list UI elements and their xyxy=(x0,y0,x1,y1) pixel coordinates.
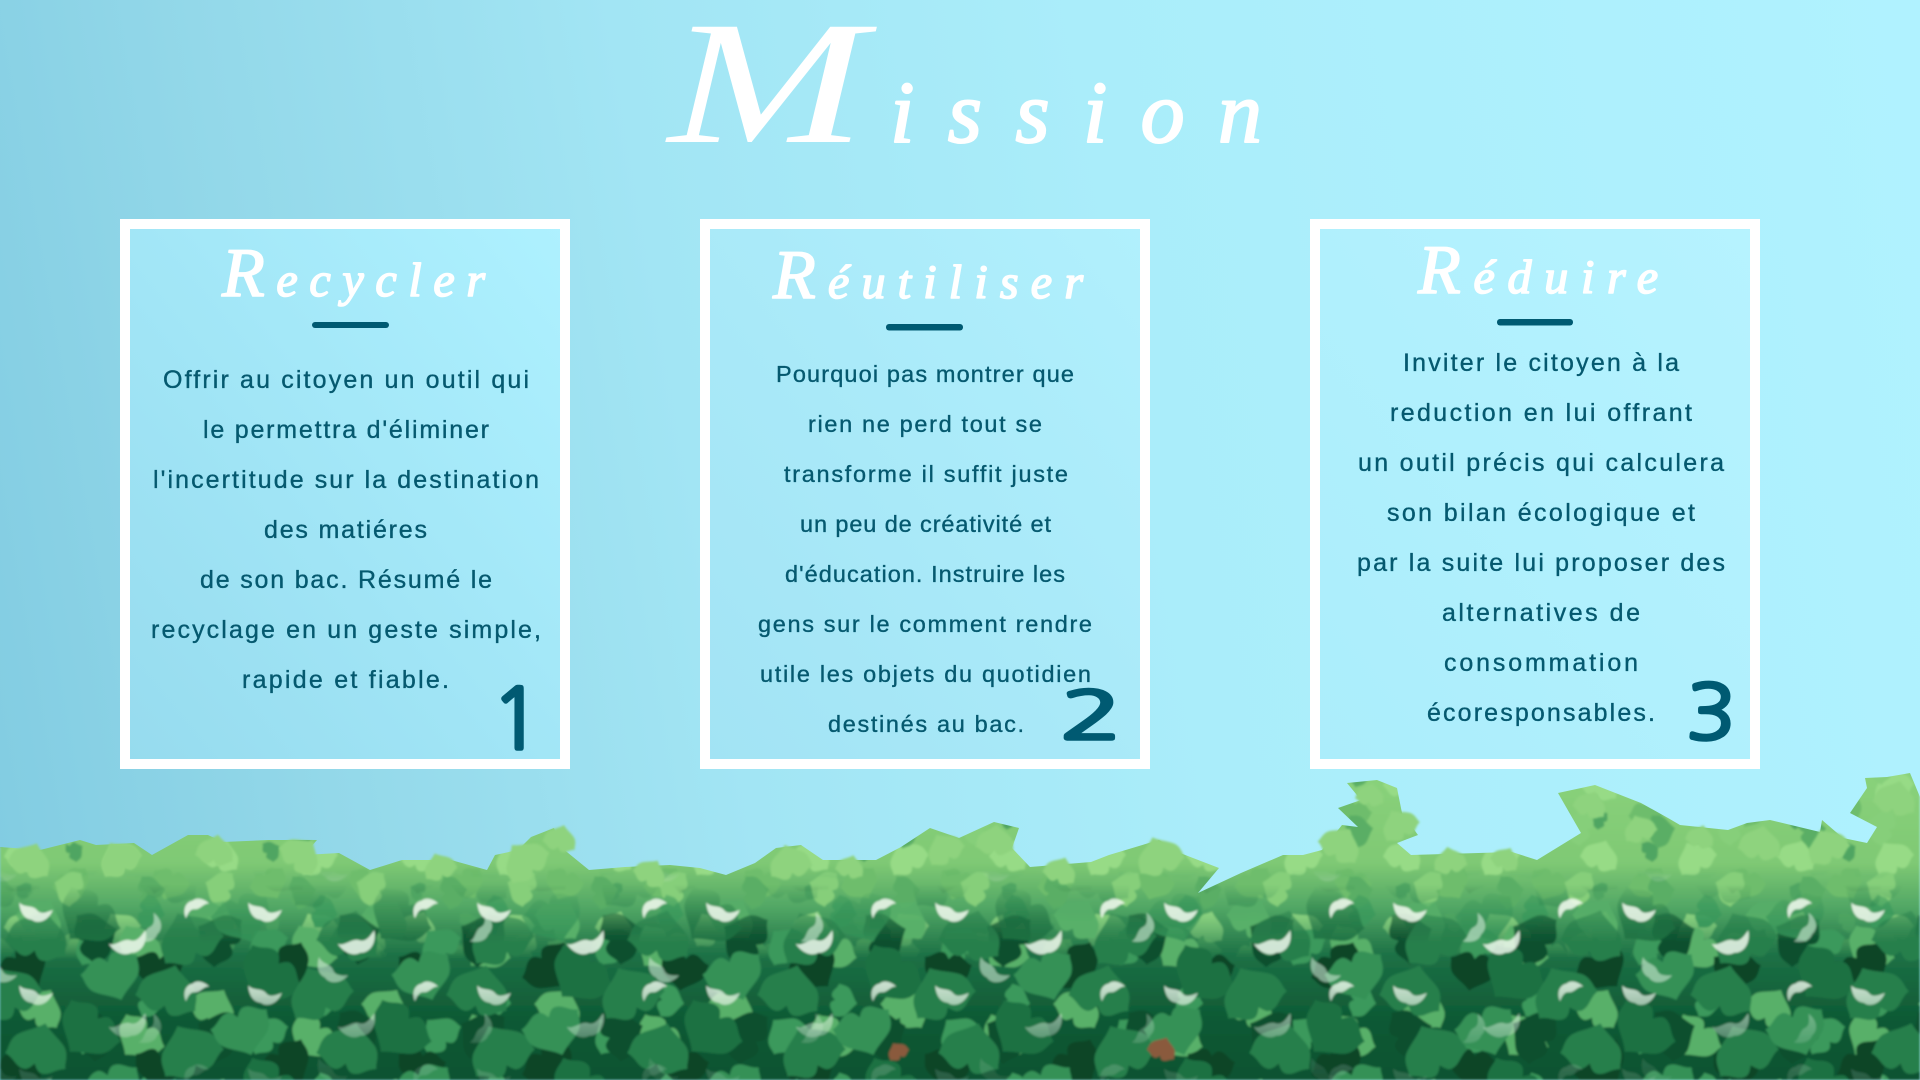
body text: de son bac. Résumé le xyxy=(200,566,492,594)
hedge of green leaves xyxy=(0,770,1920,1080)
body text: recyclage en un geste simple, xyxy=(151,616,541,644)
body text: utile les objets du quotidien xyxy=(760,661,1091,687)
body text: écoresponsables. xyxy=(1427,699,1655,727)
title: ission xyxy=(890,65,1262,162)
body text: d'éducation. Instruire les xyxy=(785,561,1065,587)
heading: Réduire: R éduire xyxy=(1417,232,1658,309)
body text: gens sur le comment rendre xyxy=(758,611,1092,637)
number 3: 3 xyxy=(1686,674,1736,750)
underline xyxy=(886,324,963,330)
body text xyxy=(1357,349,1725,727)
body text xyxy=(758,361,1092,737)
panel: Réutiliser xyxy=(705,224,1145,764)
body text: rapide et fiable. xyxy=(242,666,449,694)
body text: transforme il suffit juste xyxy=(784,461,1068,487)
leaves along the top edge xyxy=(5,775,1920,892)
body text: rien ne perd tout se xyxy=(808,411,1042,437)
body text: alternatives de xyxy=(1442,599,1640,627)
number 2: 2 xyxy=(1060,683,1122,749)
heading: Recycler: Recycler xyxy=(221,235,485,312)
body text: Offrir au citoyen un outil qui xyxy=(163,366,529,394)
body text xyxy=(151,366,541,694)
body text: destinés au bac. xyxy=(828,711,1024,737)
body text: consommation xyxy=(1444,649,1638,677)
body text: Inviter le citoyen à la xyxy=(1403,349,1679,377)
underline xyxy=(1497,319,1573,326)
brown dead leaves xyxy=(886,1036,1176,1063)
body text: Pourquoi pas montrer que xyxy=(776,361,1074,387)
underline xyxy=(312,322,389,328)
number 1: 1 xyxy=(491,678,542,762)
body text: un peu de créativité et xyxy=(800,511,1051,537)
panel: Réduire xyxy=(1315,224,1755,764)
title xyxy=(664,0,1262,181)
heading: Réutiliser: R éutiliser xyxy=(772,237,1083,314)
body text: des matiéres xyxy=(264,516,427,544)
body text: son bilan écologique et xyxy=(1387,499,1695,527)
panel: Recycler xyxy=(125,224,565,764)
body text: un outil précis qui calculera xyxy=(1358,449,1724,477)
body text: le permettra d'éliminer xyxy=(203,416,489,444)
body text: par la suite lui proposer des xyxy=(1357,549,1725,577)
body text: l'incertitude sur la destination xyxy=(153,466,539,494)
body text: reduction en lui offrant xyxy=(1390,399,1692,427)
